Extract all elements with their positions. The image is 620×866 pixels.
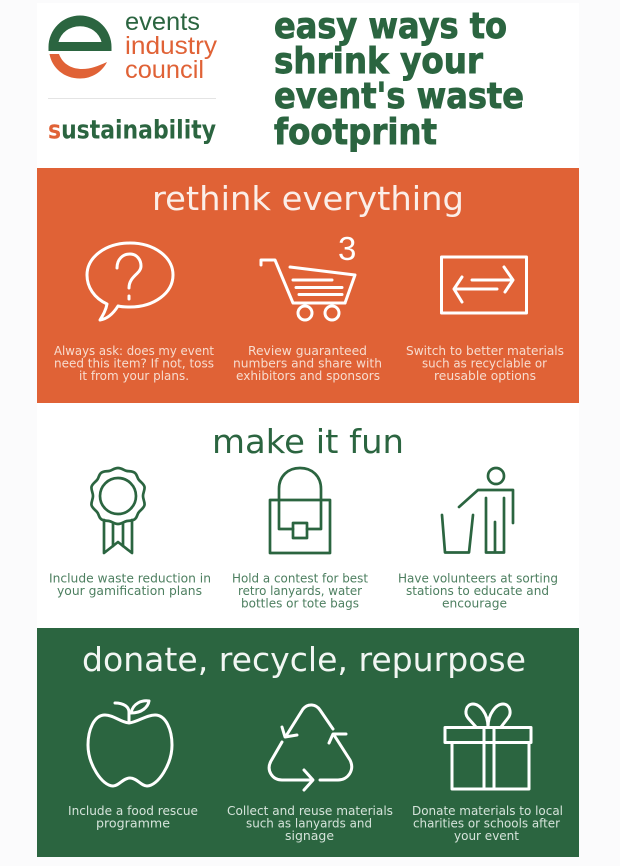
text: review guaranteed numbers: numbers and share with (233, 356, 382, 370)
text: switch to better materials: reusable options (434, 369, 536, 383)
text: donate materials: charities or schools after (413, 816, 561, 830)
text: have volunteers: stations to educate and (406, 584, 549, 598)
title: footprint (274, 112, 437, 153)
logo: events industry council (48, 8, 218, 146)
text: hold a contest: retro lanyards, water (238, 584, 363, 598)
text: include waste reduction (49, 572, 211, 598)
panel: header (37, 3, 579, 168)
text: include waste reduction: your gamification plans (57, 584, 202, 598)
heading: make it fun: make it fun (212, 422, 404, 461)
icon: e logo mark (48, 16, 112, 79)
icon: apple (88, 701, 172, 786)
text: switch to better materials: such as recyclable or (422, 356, 548, 370)
panel: rethink everything (37, 168, 579, 403)
text: review guaranteed numbers: exhibitors and sponsors (236, 369, 380, 383)
text: food rescue (68, 804, 198, 830)
title: event's waste (274, 76, 524, 117)
number: 3: 3 (338, 230, 356, 267)
text: hold a contest: bottles or tote bags (241, 596, 359, 610)
text: include waste reduction: Include waste reduction in (49, 572, 211, 586)
text: review guaranteed numbers: Review guaranteed (248, 344, 367, 358)
text: collect and reuse (227, 804, 393, 843)
text: always ask: need this item? If not, toss (54, 356, 214, 370)
title: shrink your (274, 41, 483, 82)
text: switch to better materials (406, 344, 564, 383)
icon: tote bag (270, 468, 330, 553)
text: donate materials: Donate materials to local (412, 804, 563, 818)
text: food rescue: programme (96, 816, 170, 830)
icon: shopping cart (261, 260, 355, 320)
text: hold a contest (232, 572, 368, 610)
icon: swap arrows in box (442, 257, 526, 313)
text: always ask: Always ask: does my event (54, 344, 214, 358)
text: donate materials (412, 804, 563, 843)
text: food rescue: Include a food rescue (68, 804, 198, 818)
title: easy ways to (274, 6, 507, 47)
text: collect and reuse: signage (285, 829, 334, 843)
text: collect and reuse: such as lanyards and (246, 816, 372, 830)
text: always ask (54, 344, 214, 383)
text: hold a contest: Hold a contest for best (232, 572, 368, 586)
text: always ask: it from your plans. (79, 369, 189, 383)
title (274, 6, 524, 153)
logo wordmark (125, 8, 218, 84)
panel: make it fun (37, 403, 579, 628)
icon: speech bubble with question mark (87, 243, 173, 320)
panel: donate, recycle, repurpose (37, 628, 579, 857)
text: have volunteers: encourage (442, 596, 507, 610)
text: review guaranteed numbers (233, 344, 382, 383)
icon: gift box (445, 704, 531, 789)
text: have volunteers: Have volunteers at sorting (398, 572, 558, 586)
text: donate materials: your event (454, 829, 519, 843)
text: collect and reuse: Collect and reuse materials (227, 804, 393, 818)
icon: person at recycling bin (442, 468, 513, 552)
logo wordmark: industry (125, 32, 218, 60)
logo wordmark: council (125, 56, 204, 84)
sustainability wordmark: sustainability (48, 116, 216, 146)
logo wordmark: events (125, 8, 200, 36)
icon: recycling arrows (269, 705, 352, 790)
icon: award rosette (91, 468, 145, 553)
text: switch to better materials: Switch to better materials (406, 344, 564, 358)
heading: rethink everything: rethink everything (152, 179, 464, 218)
text: have volunteers (398, 572, 558, 610)
heading: donate, recycle, repurpose: donate, recycle, repurpose (82, 640, 526, 679)
